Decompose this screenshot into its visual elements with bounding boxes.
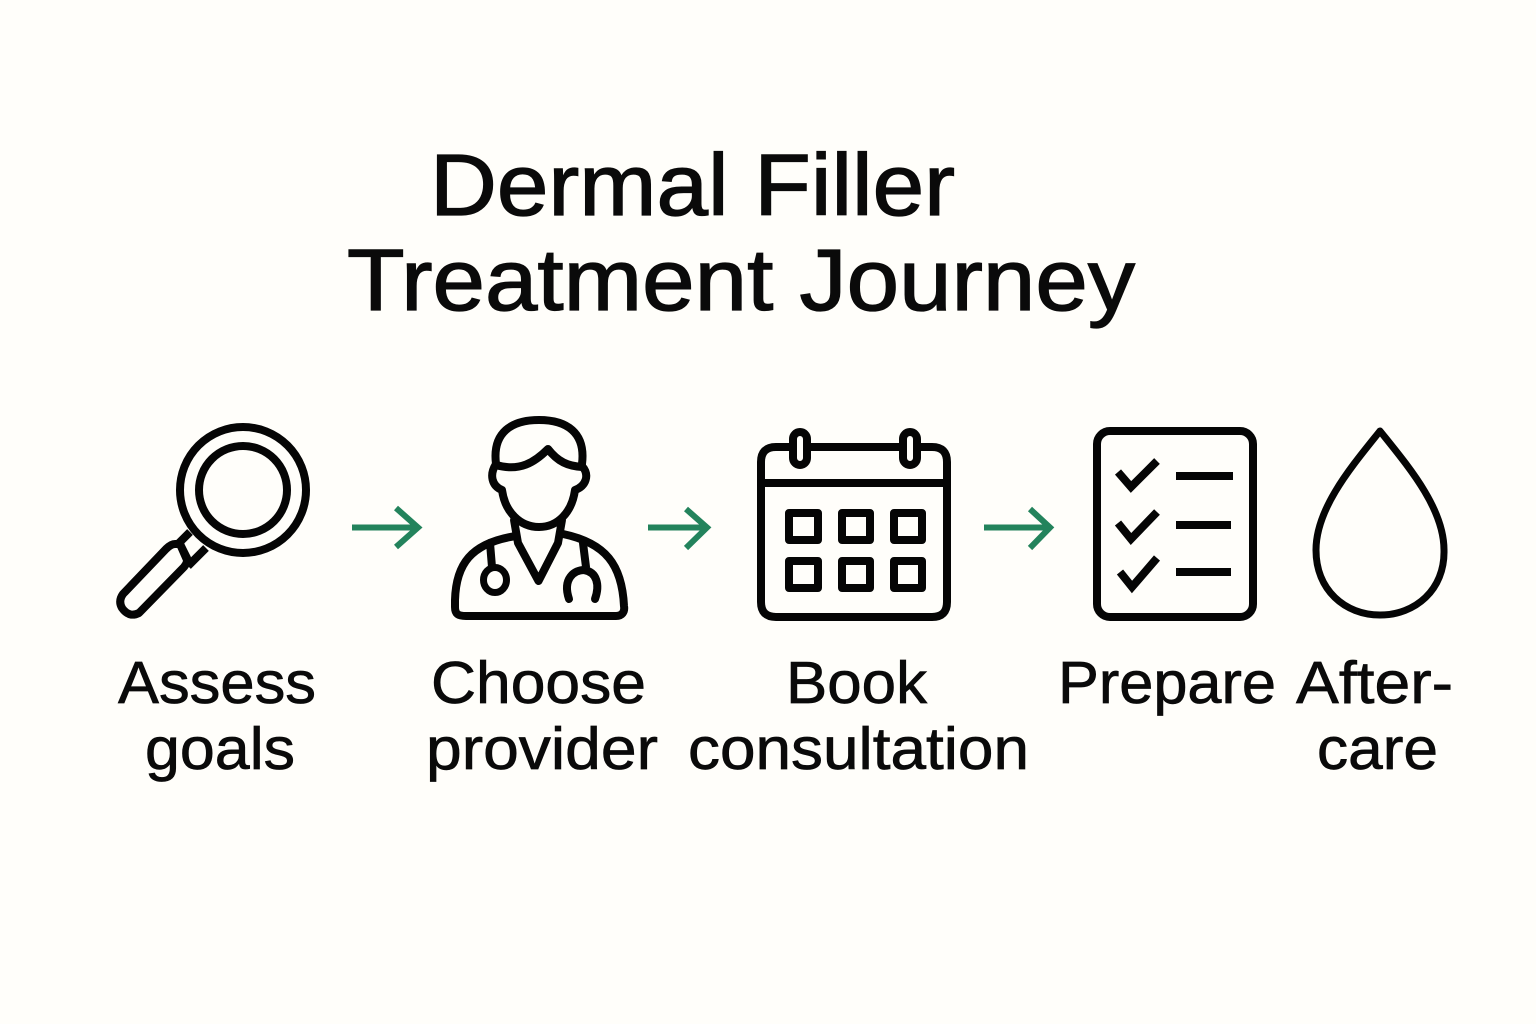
label: Assess goals: goals (145, 716, 295, 782)
label: Prepare: Prepare (1058, 650, 1276, 716)
icon: calendar (761, 432, 947, 617)
title (347, 137, 1136, 329)
label: Choose provider: Choose (431, 650, 646, 716)
icon: checklist (1097, 431, 1253, 617)
icon: droplet (1316, 431, 1444, 615)
label: Choose provider: provider (426, 716, 658, 782)
label: After-care: care (1317, 716, 1438, 782)
label: After-care (1296, 650, 1453, 782)
label: Assess goals (118, 650, 316, 782)
label: Choose provider (426, 650, 658, 782)
label: Book consultation: Book (786, 650, 928, 716)
arrow: step 2 to 3 (648, 509, 707, 548)
label: After-care: After- (1296, 650, 1453, 716)
arrow: step 3 to 4 (984, 509, 1050, 548)
label: Assess goals: Assess (118, 650, 316, 716)
title: Treatment Journey (347, 232, 1136, 329)
icon: magnifying glass (120, 427, 306, 615)
arrow: step 1 to 2 (352, 508, 418, 547)
title: Dermal Filler (430, 137, 955, 234)
icon: doctor (455, 420, 624, 616)
label: Book consultation (688, 650, 1029, 782)
label: Book consultation: consultation (688, 716, 1029, 782)
